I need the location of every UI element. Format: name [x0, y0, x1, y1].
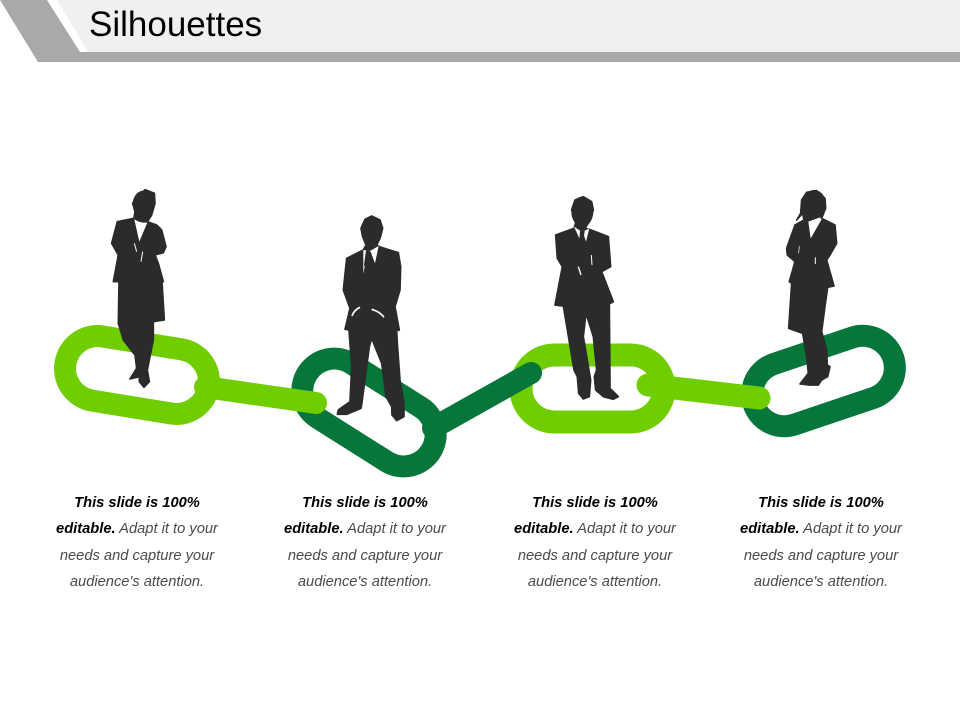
connector 3: [648, 385, 759, 398]
text block 4: audience's attention.: [754, 574, 888, 590]
link 2: [290, 346, 448, 479]
text block 2: editable. Adapt it to your: [284, 521, 446, 537]
text block 2: [284, 495, 446, 590]
text block 4: This slide is 100%: [758, 495, 884, 511]
text block 3: [514, 495, 676, 590]
link 3: [521, 355, 664, 422]
link 1: [60, 331, 214, 419]
connector 2: [433, 373, 531, 428]
text block 1: editable. Adapt it to your: [56, 521, 218, 537]
link 4: [744, 327, 903, 435]
text block 3: needs and capture your: [518, 548, 672, 564]
text block 1: audience's attention.: [70, 574, 204, 590]
text block 1: needs and capture your: [60, 548, 214, 564]
silhouette: woman 1: [112, 190, 166, 387]
silhouette: man 3: [555, 197, 618, 399]
text block 1: [56, 495, 218, 590]
text block 4: editable. Adapt it to your: [740, 521, 902, 537]
text block 2: needs and capture your: [288, 548, 442, 564]
text block 4: [740, 495, 902, 590]
connector 1: [205, 387, 316, 403]
title: Silhouettes: [89, 5, 262, 44]
text block 3: This slide is 100%: [532, 495, 658, 511]
text block 2: audience's attention.: [298, 574, 432, 590]
text block 3: audience's attention.: [528, 574, 662, 590]
text block 4: needs and capture your: [744, 548, 898, 564]
silhouette: woman 4: [787, 190, 837, 385]
text block 2: This slide is 100%: [302, 495, 428, 511]
text block 1: This slide is 100%: [74, 495, 200, 511]
silhouette: man 2: [337, 216, 404, 421]
text block 3: editable. Adapt it to your: [514, 521, 676, 537]
